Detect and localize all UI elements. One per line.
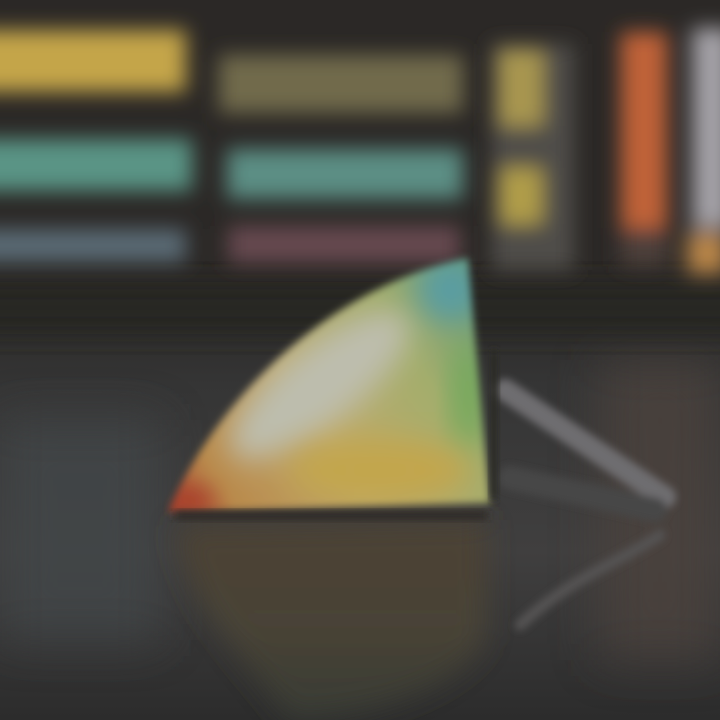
board background (0, 0, 720, 300)
table tone patches (0, 360, 720, 660)
right column bars (492, 28, 720, 274)
prism chart (166, 258, 490, 512)
arrow shape (505, 390, 665, 625)
left colour bars (0, 30, 463, 263)
reflection of prism on table (176, 520, 486, 720)
table surface (0, 300, 720, 720)
dark horizon band (0, 282, 720, 334)
prism right edge shadow (490, 350, 498, 500)
prism base shadow (175, 511, 487, 520)
